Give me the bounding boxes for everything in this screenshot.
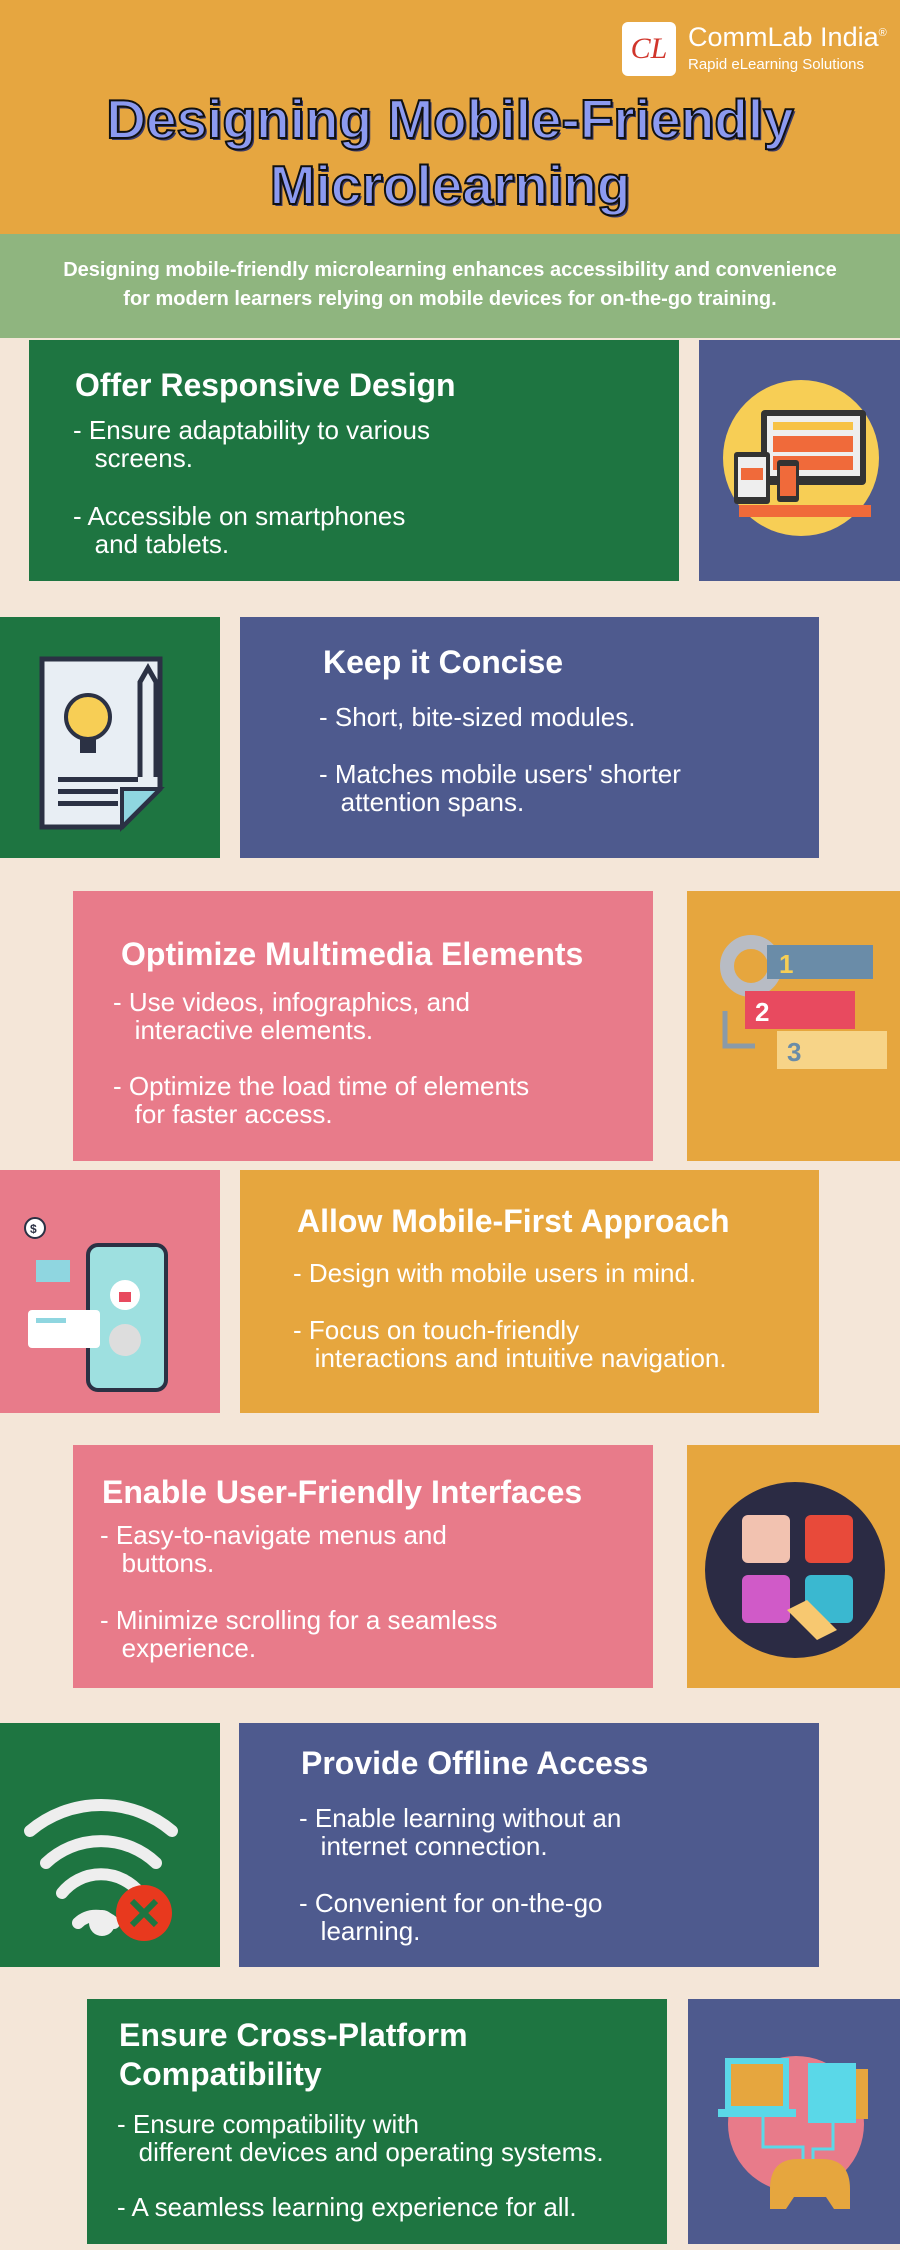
- icon: numbered steps: 1: [779, 949, 793, 979]
- panel 6: offline access: Provide Offline Access: [301, 1745, 648, 1781]
- panel 7: cross-platform: [87, 1999, 667, 2244]
- panel 5: user-friendly interfaces: [73, 1445, 653, 1688]
- logo: CommLab India®: [688, 22, 887, 52]
- panel 6: offline access: [239, 1723, 819, 1967]
- panel 2: concise: - Short, bite-sized modules.: [319, 702, 635, 732]
- panel 3: multimedia: interactive elements.: [135, 1015, 373, 1045]
- panel 1: responsive design: - Ensure adaptability to various: [73, 415, 430, 445]
- title: Microlearning: [270, 154, 630, 216]
- panel 5: user-friendly interfaces: experience.: [122, 1633, 256, 1663]
- logo: CL: [631, 32, 667, 65]
- icon: numbered steps: [687, 891, 900, 1161]
- logo: Rapid eLearning Solutions: [688, 56, 864, 73]
- panel 2: concise: - Matches mobile users' shorter: [319, 759, 681, 789]
- subtitle band: [0, 234, 900, 338]
- panel 6: offline access: learning.: [321, 1916, 420, 1946]
- icon: idea document: [0, 617, 220, 858]
- icon: secure phone: [0, 1170, 220, 1413]
- panel 5: user-friendly interfaces: buttons.: [122, 1548, 214, 1578]
- panel 5: user-friendly interfaces: - Minimize scrolling for a seamless: [100, 1605, 497, 1635]
- subtitle band: Designing mobile-friendly microlearning enhances accessibility and convenience: [63, 259, 837, 281]
- panel 7: cross-platform: different devices and operating systems.: [139, 2137, 604, 2167]
- panel 7: cross-platform: - A seamless learning experience for all.: [117, 2192, 577, 2222]
- icon: numbered steps: 2: [755, 997, 769, 1027]
- icon: app tiles: [687, 1445, 900, 1688]
- icon: devices and gamepad: [688, 1999, 900, 2244]
- panel 1: responsive design: screens.: [95, 443, 193, 473]
- panel 5: user-friendly interfaces: Enable User-Friendly Interfaces: [102, 1474, 582, 1510]
- panel 4: mobile-first: - Design with mobile users in mind.: [293, 1258, 696, 1288]
- panel 3: multimedia: [73, 891, 653, 1161]
- panel 1: responsive design: and tablets.: [95, 529, 229, 559]
- panel 6: offline access: - Enable learning without an: [299, 1803, 621, 1833]
- title: [106, 88, 796, 218]
- icon: responsive devices: [699, 340, 900, 581]
- panel 2: concise: [240, 617, 819, 858]
- panel 3: multimedia: for faster access.: [135, 1099, 333, 1129]
- panel 6: offline access: - Convenient for on-the-go: [299, 1888, 603, 1918]
- icon: no wifi: [0, 1723, 220, 1967]
- panel 7: cross-platform: - Ensure compatibility with: [117, 2109, 419, 2139]
- panel 3: multimedia: - Use videos, infographics, and: [113, 987, 470, 1017]
- panel 1: responsive design: [29, 340, 679, 581]
- panel 2: concise: Keep it Concise: [323, 644, 563, 680]
- panel 3: multimedia: Optimize Multimedia Elements: [121, 936, 583, 972]
- icon: numbered steps: 3: [787, 1037, 801, 1067]
- panel 5: user-friendly interfaces: - Easy-to-navigate menus and: [100, 1520, 447, 1550]
- title: Designing Mobile-Friendly: [106, 88, 794, 150]
- panel 7: cross-platform: Ensure Cross-Platform: [119, 2017, 468, 2053]
- panel 1: responsive design: - Accessible on smartphones: [73, 501, 405, 531]
- panel 4: mobile-first: Allow Mobile-First Approach: [297, 1203, 730, 1239]
- panel 6: offline access: internet connection.: [321, 1831, 548, 1861]
- header band: [0, 0, 900, 234]
- panel 2: concise: attention spans.: [341, 787, 524, 817]
- panel 4: mobile-first: interactions and intuitive navigation.: [315, 1343, 727, 1373]
- subtitle band: for modern learners relying on mobile devices for on-the-go training.: [123, 288, 777, 310]
- panel 4: mobile-first: - Focus on touch-friendly: [293, 1315, 579, 1345]
- panel 4: mobile-first: [240, 1170, 819, 1413]
- panel 1: responsive design: Offer Responsive Design: [75, 367, 456, 403]
- panel 3: multimedia: - Optimize the load time of elements: [113, 1071, 529, 1101]
- panel 7: cross-platform: Compatibility: [119, 2056, 322, 2092]
- icon: secure phone: $: [30, 1222, 37, 1236]
- logo: [622, 22, 887, 76]
